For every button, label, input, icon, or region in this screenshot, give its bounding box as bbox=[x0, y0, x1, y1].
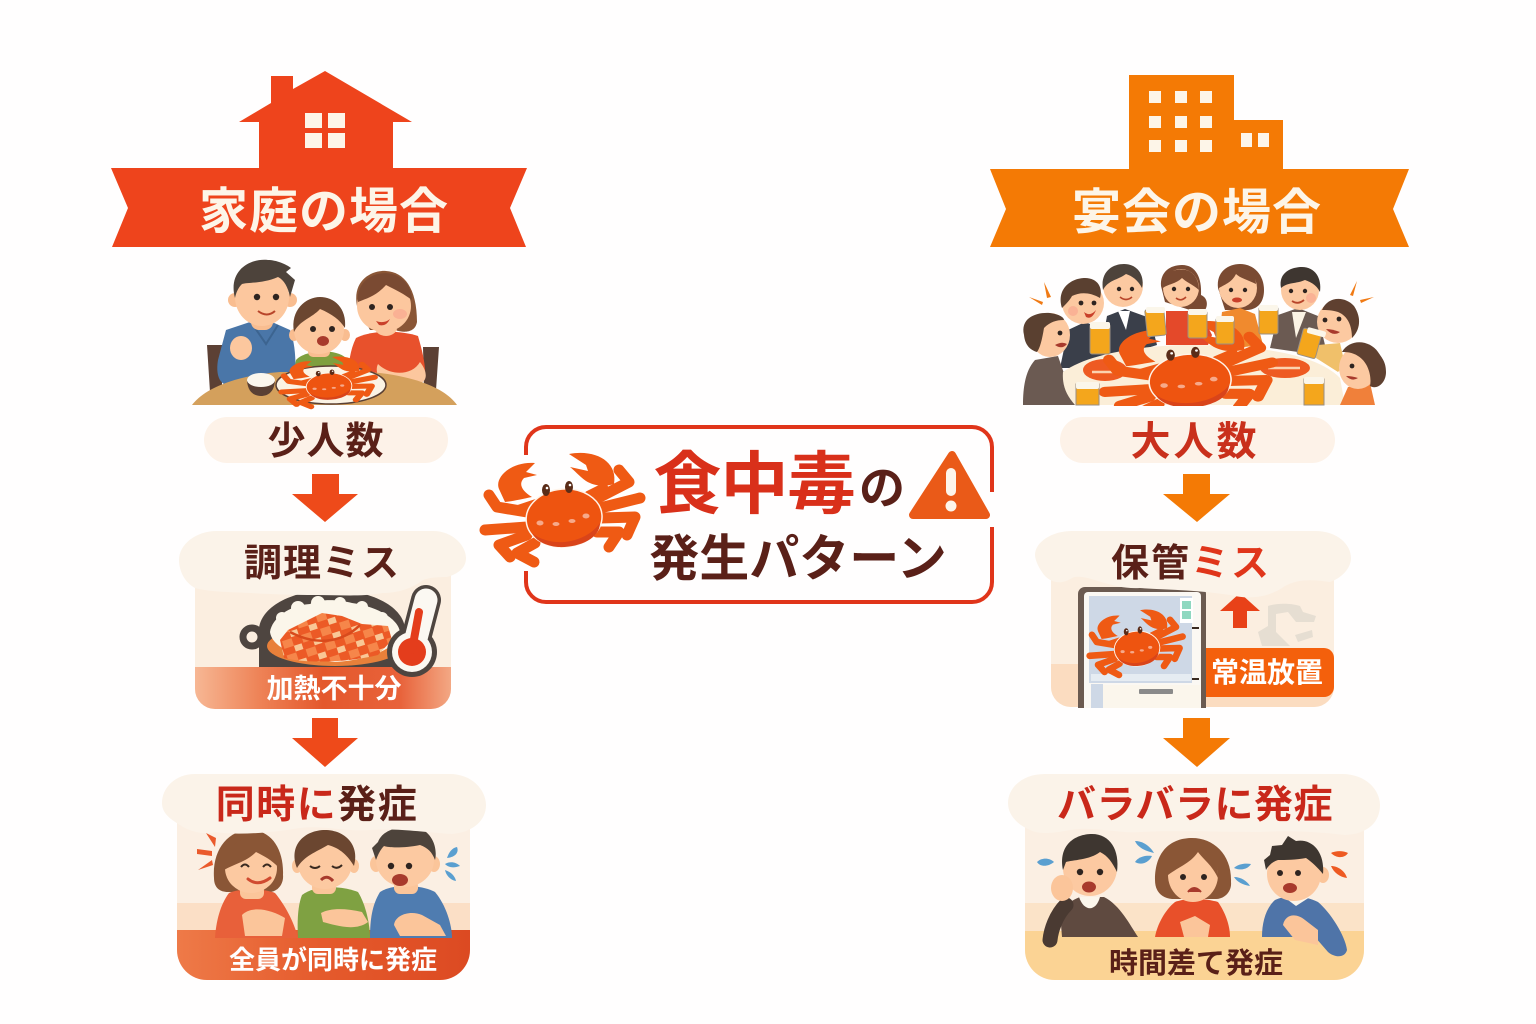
guest 5 bbox=[1218, 264, 1264, 348]
illustration: pot with meat bbox=[243, 590, 405, 667]
card heading: バラバラに発症 bbox=[1057, 784, 1333, 827]
card heading: 調理ミス bbox=[244, 543, 400, 585]
guest 2 bbox=[1060, 278, 1110, 368]
arrow: temperature up bbox=[1220, 593, 1260, 628]
plate with crab bbox=[276, 357, 386, 407]
person: man with hand on chest bbox=[1262, 836, 1347, 956]
icon: house bbox=[239, 71, 412, 170]
child bbox=[289, 297, 350, 372]
person: man bbox=[370, 827, 452, 938]
label pill: 大人数 bbox=[1060, 417, 1335, 464]
card: 同時に発症 bbox=[162, 774, 486, 980]
person: boy bbox=[292, 830, 370, 938]
result band bbox=[1025, 931, 1364, 980]
result label: 全員が同時に発症 bbox=[229, 945, 437, 975]
left column: home case bbox=[111, 71, 527, 980]
card: 保管ミス bbox=[1035, 531, 1351, 708]
person: woman bbox=[1155, 838, 1231, 937]
title の: の bbox=[859, 462, 905, 514]
card body bbox=[1025, 818, 1364, 980]
heading ribbon: 家庭の場合: 家庭の場合 bbox=[199, 185, 449, 239]
heading ribbon: 宴会の場合: 宴会の場合 bbox=[1072, 186, 1322, 240]
label tag bbox=[1206, 648, 1334, 697]
banquet table bbox=[1063, 345, 1345, 405]
label pill: 少人数: 少人数 bbox=[267, 421, 385, 463]
heading ribbon: 家庭の場合 bbox=[111, 168, 527, 247]
crab platter bbox=[1105, 321, 1272, 421]
infographic canvas bbox=[111, 71, 1409, 980]
result band bbox=[177, 930, 470, 980]
header tab bbox=[179, 531, 466, 596]
card heading: 同時に発症 bbox=[216, 784, 418, 827]
illustration: banquet bbox=[1023, 264, 1386, 421]
title line 2: 発生パターン bbox=[649, 531, 947, 587]
arrow: down 1 bbox=[292, 474, 358, 522]
guest 4 bbox=[1161, 265, 1212, 345]
card body bbox=[195, 575, 451, 709]
card body bbox=[1051, 575, 1334, 707]
guest 7 bbox=[1316, 299, 1359, 372]
result band bbox=[195, 667, 451, 709]
icon: building bbox=[1129, 75, 1283, 170]
sparks bbox=[1029, 281, 1374, 305]
sparks: sweat bbox=[445, 847, 460, 881]
right column: banquet case bbox=[990, 75, 1409, 980]
illustration: family at table bbox=[192, 260, 457, 407]
bowl of rice bbox=[247, 373, 275, 396]
card heading: 保管ミス bbox=[1111, 543, 1271, 585]
header tab bbox=[162, 774, 486, 834]
label pill: 少人数 bbox=[204, 417, 448, 463]
icon: refrigerator bbox=[1078, 587, 1206, 708]
header tab bbox=[1008, 774, 1380, 835]
title line 1: 食中毒 bbox=[653, 447, 855, 523]
icon: thermometer bbox=[387, 600, 437, 677]
guest 1 bbox=[1023, 313, 1075, 405]
arrow: down 2 bbox=[292, 718, 358, 767]
center title box bbox=[485, 427, 992, 602]
result label: 加熱不十分 bbox=[266, 674, 402, 704]
father bbox=[217, 260, 297, 385]
arrow: down 4 bbox=[1163, 718, 1230, 767]
card: バラバラに発症 bbox=[1008, 774, 1380, 980]
card: 調理ミス bbox=[179, 531, 466, 709]
frame bbox=[526, 427, 992, 602]
sparks: distress bbox=[197, 833, 216, 870]
side plates bbox=[1083, 357, 1311, 381]
mother bbox=[348, 271, 426, 384]
arrow: down 3 bbox=[1163, 474, 1230, 522]
floor bbox=[1051, 664, 1334, 707]
result label: 時間差て発症 bbox=[1109, 947, 1283, 980]
tag label: 常温放置 bbox=[1211, 657, 1323, 688]
card body bbox=[177, 818, 470, 980]
steam bbox=[1258, 604, 1316, 646]
sweat marks bbox=[1037, 841, 1251, 886]
table bbox=[192, 372, 457, 405]
person: woman bbox=[214, 830, 298, 938]
person: man with hand to head bbox=[1050, 834, 1138, 940]
floor band bbox=[177, 903, 470, 933]
icon: crab bbox=[485, 453, 640, 562]
beer mugs bbox=[1076, 305, 1326, 405]
header tab bbox=[1035, 531, 1351, 597]
guest 6 bbox=[1270, 267, 1325, 354]
wall band bbox=[1025, 903, 1364, 933]
heading ribbon: 宴会の場合 bbox=[990, 169, 1409, 247]
guest 3 bbox=[1100, 264, 1157, 355]
label pill: 大人数: 大人数 bbox=[1130, 420, 1260, 464]
guest 8 bbox=[1339, 342, 1386, 405]
icon: warning triangle bbox=[913, 455, 986, 515]
stress marks bbox=[1331, 851, 1348, 878]
